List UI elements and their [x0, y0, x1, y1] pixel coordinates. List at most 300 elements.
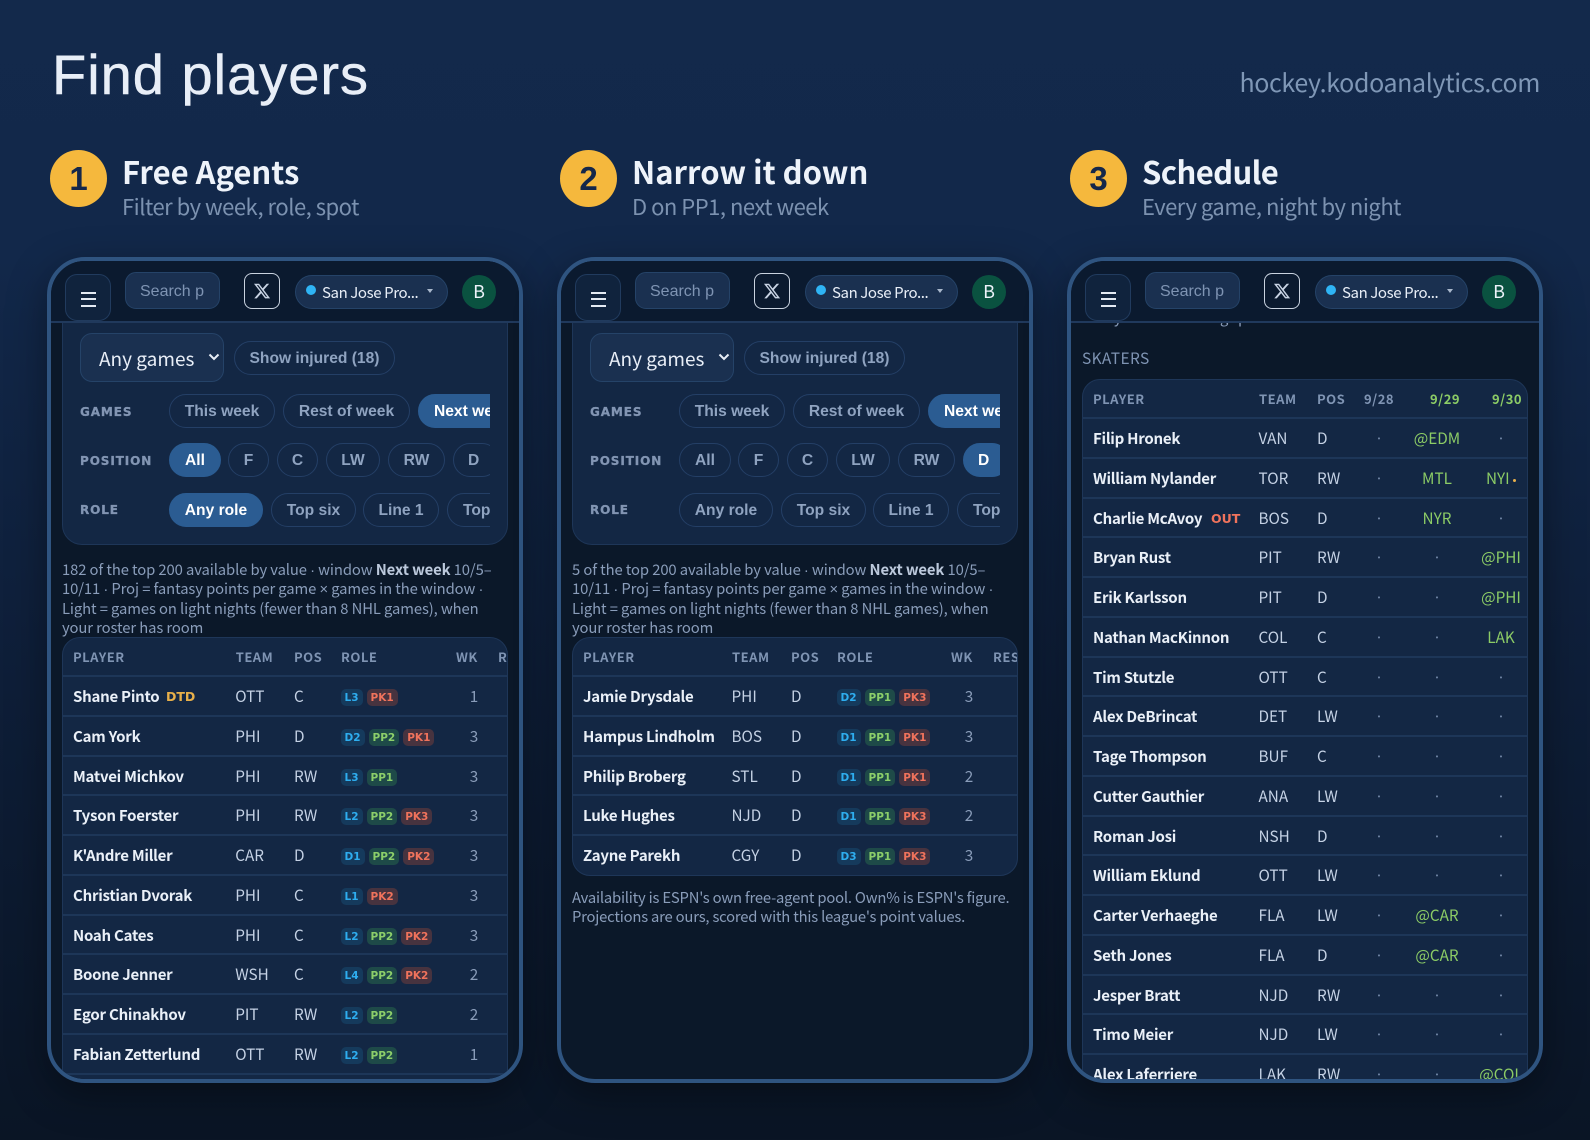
user avatar	[1482, 275, 1516, 309]
row: Egor Chinakhov: L2	[344, 1010, 358, 1022]
row: Philip Broberg	[573, 754, 1019, 794]
position label: POSITION	[590, 454, 662, 468]
row: Philip Broberg: 2	[965, 764, 973, 786]
row: Tage Thompson	[1083, 735, 1529, 775]
position filter pills: F	[754, 452, 763, 469]
row: Zayne Parekh: CGY	[732, 844, 759, 866]
row: Nathan MacKinnon: LAK	[1487, 626, 1515, 648]
row: Tyson Foerster: Tyson Foerster	[73, 805, 178, 826]
row: Matvei Michkov: Matvei Michkov	[73, 766, 184, 786]
site URL: hockey.kodoanalytics.com	[1239, 64, 1540, 100]
row: Noah Cates	[63, 914, 509, 953]
table header	[1093, 389, 1522, 408]
position filter pills	[169, 443, 490, 477]
row: Carter Verhaeghe: FLA	[1258, 904, 1285, 926]
step 1 heading: Free Agents	[122, 148, 299, 193]
row: Cam York: 3	[470, 725, 478, 747]
row: Timo Meier: LW	[1317, 1023, 1338, 1045]
position filter pills: F	[244, 452, 253, 469]
row: Christian Dvorak: L1	[344, 891, 358, 903]
icon: X button	[754, 273, 790, 309]
row: Philip Broberg: PP1	[869, 772, 891, 784]
row: Tage Thompson: ·	[1433, 745, 1441, 767]
explanatory note: your roster has room	[572, 617, 713, 638]
position filter pills: All	[695, 452, 715, 469]
table header: TEAM	[732, 647, 770, 666]
step 2 heading: Narrow it down	[632, 148, 868, 193]
games filter pills	[679, 394, 1000, 428]
row: Hampus Lindholm: PP1	[869, 732, 891, 744]
row: William Eklund	[1083, 854, 1529, 894]
role filter pills	[679, 493, 1000, 527]
explanatory note: 182 of the top 200 available by value · window Next week 10/5–	[62, 559, 492, 580]
row: Tyson Foerster: PHI	[235, 804, 260, 826]
row: Carter Verhaeghe: @CAR	[1415, 904, 1459, 926]
footer note	[572, 887, 1009, 927]
row: Zayne Parekh: PK3	[903, 851, 926, 863]
row: Cutter Gauthier: ANA	[1258, 785, 1288, 807]
position filter pills	[679, 443, 1000, 477]
row: Zayne Parekh: D3	[840, 851, 857, 863]
row: Noah Cates: 3	[470, 924, 478, 946]
row: Boone Jenner	[63, 953, 509, 993]
row: Tim Stutzle: ·	[1497, 666, 1505, 688]
panel: phone 3 schedule	[1067, 257, 1543, 1083]
row: Hampus Lindholm: PK1	[903, 732, 926, 744]
row: Carter Verhaeghe: Carter Verhaeghe	[1093, 905, 1217, 926]
app top bar	[561, 261, 1029, 323]
row: Fabian Zetterlund: RW	[294, 1043, 317, 1065]
row: Luke Hughes: PK3	[903, 811, 926, 823]
league selector	[1315, 275, 1468, 309]
row: Noah Cates: C	[294, 924, 304, 946]
row: Jamie Drysdale: D2	[840, 692, 857, 704]
row: Filip Hronek: ·	[1375, 427, 1383, 449]
row: Filip Hronek: VAN	[1258, 427, 1287, 449]
row: Fabian Zetterlund: Fabian Zetterlund	[73, 1044, 200, 1065]
position filter pills: D	[978, 452, 989, 469]
games select: Any games	[609, 345, 704, 372]
row: Matvei Michkov: L3	[344, 772, 358, 784]
role filter pills	[169, 493, 490, 527]
row: Hampus Lindholm: BOS	[732, 725, 762, 747]
row: Alex DeBrincat: LW	[1317, 705, 1338, 727]
row: Bryan Rust: Bryan Rust	[1093, 547, 1171, 568]
icon: menu button	[1085, 274, 1131, 321]
row: Jamie Drysdale: PK3	[903, 692, 926, 704]
position filter pills: C	[802, 452, 813, 469]
row: William Eklund: OTT	[1258, 864, 1288, 886]
row: William Nylander: MTL	[1422, 467, 1452, 489]
row: Jamie Drysdale: 3	[965, 685, 973, 707]
row: Charlie McAvoy: ·	[1497, 506, 1505, 528]
row: Fabian Zetterlund: 1	[470, 1043, 478, 1065]
row: Timo Meier: ·	[1375, 1023, 1383, 1045]
row: Carter Verhaeghe: LW	[1317, 904, 1338, 926]
row: Philip Broberg: Philip Broberg	[583, 766, 686, 786]
row: Cam York: Cam York	[73, 726, 140, 747]
position filter pills: RW	[914, 452, 939, 469]
row: Hampus Lindholm	[573, 715, 1019, 754]
row: William Nylander: ·	[1375, 467, 1383, 489]
step 1 number badge	[50, 150, 107, 207]
row: Roman Josi: D	[1317, 824, 1328, 846]
row: Roman Josi: ·	[1497, 824, 1505, 846]
row: Tyson Foerster: RW	[294, 804, 317, 826]
row: Alex DeBrincat: ·	[1497, 705, 1505, 727]
row: Luke Hughes: Luke Hughes	[583, 805, 675, 826]
row: Nathan MacKinnon	[1083, 616, 1529, 656]
row: Cam York: PP2	[373, 732, 395, 744]
row: Nathan MacKinnon: ·	[1433, 626, 1441, 648]
row: Boone Jenner: Boone Jenner	[73, 964, 172, 985]
user avatar	[462, 275, 496, 309]
row: Tage Thompson: BUF	[1258, 745, 1288, 767]
icon: menu button	[575, 274, 621, 321]
row: William Nylander: NYI	[1486, 467, 1510, 489]
scrolled text peeking under top bar: g	[1220, 307, 1228, 328]
row: Boone Jenner: PP2	[370, 970, 393, 982]
row: Cutter Gauthier: ·	[1375, 785, 1383, 807]
skaters label: SKATERS	[1082, 347, 1150, 369]
position filter pills: C	[292, 452, 303, 469]
row: Philip Broberg: D1	[840, 772, 857, 784]
row: Egor Chinakhov: PIT	[235, 1003, 259, 1025]
row: Seth Jones: Seth Jones	[1093, 945, 1171, 966]
row: Erik Karlsson: @PHI	[1481, 586, 1521, 608]
row: Hampus Lindholm: 3	[965, 725, 973, 747]
row: Nathan MacKinnon: COL	[1258, 626, 1287, 648]
row: Luke Hughes: NJD	[732, 804, 761, 826]
row: Boone Jenner: 2	[470, 963, 478, 985]
row: Charlie McAvoy: D	[1317, 506, 1328, 528]
row: Fabian Zetterlund: PP2	[370, 1050, 393, 1062]
row: Shane Pinto	[63, 675, 509, 715]
table header: 9/30	[1492, 389, 1522, 408]
row: William Nylander: RW	[1317, 467, 1340, 489]
row: Noah Cates: PP2	[370, 930, 393, 942]
table header: PLAYER	[583, 647, 635, 666]
row: Jamie Drysdale: Jamie Drysdale	[583, 686, 694, 707]
table header: POS	[294, 647, 322, 666]
row: Seth Jones: @CAR	[1415, 944, 1459, 966]
row: Tage Thompson: C	[1317, 745, 1327, 767]
table header: 9/29	[1430, 389, 1460, 408]
row: Cutter Gauthier	[1083, 775, 1529, 814]
row: Charlie McAvoy: ·	[1375, 506, 1383, 528]
step 2 number badge	[560, 150, 617, 207]
row: Charlie McAvoy: NYR	[1423, 506, 1451, 528]
row: Jamie Drysdale: PHI	[732, 685, 757, 707]
row: Hampus Lindholm: Hampus Lindholm	[583, 726, 715, 747]
explanatory note: 10/11 · Proj = fantasy points per game × games in the window ·	[62, 578, 483, 599]
panel: phone 2 narrow it down	[557, 257, 1033, 1083]
games select: Any games	[99, 345, 194, 372]
row: Christian Dvorak: PK2	[370, 891, 394, 903]
step 3 number badge: 3	[1089, 160, 1108, 197]
row: Timo Meier: NJD	[1258, 1023, 1288, 1045]
row: Jamie Drysdale: PP1	[869, 692, 891, 704]
row: William Nylander: TOR	[1258, 467, 1288, 489]
row: Matvei Michkov: PP1	[370, 772, 393, 784]
table header: WK	[951, 647, 973, 666]
row: Boone Jenner: WSH	[235, 963, 269, 985]
row: Luke Hughes: D1	[840, 811, 857, 823]
row: Christian Dvorak	[63, 874, 509, 914]
role filter pills: Any role	[185, 502, 247, 519]
row: Tyson Foerster: 3	[470, 804, 478, 826]
games filter pills: This week	[185, 403, 259, 420]
user avatar: B	[1493, 278, 1505, 304]
filter card	[572, 231, 1018, 545]
games label: GAMES	[590, 405, 642, 419]
row: Roman Josi: ·	[1433, 824, 1441, 846]
row: Philip Broberg: D	[791, 764, 802, 786]
row: Tim Stutzle	[1083, 656, 1529, 695]
row: Luke Hughes: PP1	[869, 811, 891, 823]
role label: ROLE	[80, 503, 119, 517]
row: Luke Hughes: D	[791, 804, 802, 826]
table header: TEAM	[1259, 389, 1297, 408]
row: Carter Verhaeghe: ·	[1497, 904, 1505, 926]
row: Seth Jones: ·	[1497, 944, 1505, 966]
row: William Eklund: LW	[1317, 864, 1338, 886]
row: Cutter Gauthier: LW	[1317, 785, 1338, 807]
row: Charlie McAvoy	[1083, 496, 1529, 536]
row: Shane Pinto: DTD	[166, 689, 195, 704]
row: Charlie McAvoy: BOS	[1258, 506, 1289, 528]
app top bar	[51, 261, 519, 323]
footer note: Availability is ESPN's own free-agent pool. Own% is ESPN's figure.	[572, 887, 1009, 908]
row: Charlie McAvoy: OUT	[1211, 510, 1240, 526]
row: Zayne Parekh: D	[791, 844, 802, 866]
table header: POS	[791, 647, 819, 666]
role filter pills: Top six	[797, 502, 850, 519]
row: William Nylander: William Nylander	[1093, 468, 1216, 489]
row: Seth Jones	[1083, 934, 1529, 974]
games filter pills: This week	[695, 403, 769, 420]
row: Jesper Bratt: ·	[1375, 984, 1383, 1006]
role filter pills: Top six	[287, 502, 340, 519]
games filter pills: Rest of week	[809, 403, 904, 420]
games select	[80, 333, 224, 382]
row: Tim Stutzle: OTT	[1258, 666, 1288, 688]
row: K'Andre Miller: PP2	[373, 851, 395, 863]
user avatar: B	[473, 278, 485, 304]
row: Tyson Foerster: PP2	[370, 811, 393, 823]
table header: 9/28	[1364, 389, 1394, 408]
title: Find players	[52, 43, 369, 106]
table header: PLAYER	[1093, 389, 1145, 408]
scrolled text peeking under top bar: p	[1238, 307, 1247, 328]
row: Carter Verhaeghe: ·	[1375, 904, 1383, 926]
row: Boone Jenner: L4	[344, 970, 358, 982]
row: William Eklund: ·	[1433, 864, 1441, 886]
row: Cam York	[63, 715, 509, 754]
table header: POS	[1317, 389, 1345, 408]
row: Erik Karlsson: Erik Karlsson	[1093, 587, 1187, 608]
row: Erik Karlsson: PIT	[1258, 586, 1282, 608]
row: Filip Hronek	[1083, 417, 1529, 457]
row: Nathan MacKinnon: ·	[1375, 626, 1383, 648]
row: Noah Cates: L2	[344, 930, 358, 942]
row: Jesper Bratt: RW	[1317, 984, 1340, 1006]
row: Bryan Rust	[1083, 536, 1529, 576]
row: Timo Meier	[1083, 1013, 1529, 1053]
row: Christian Dvorak: PHI	[235, 884, 260, 906]
row: Nathan MacKinnon: Nathan MacKinnon	[1093, 627, 1229, 648]
row: Alex DeBrincat: Alex DeBrincat	[1093, 706, 1197, 727]
position filter pills: All	[185, 452, 205, 469]
row: Erik Karlsson: D	[1317, 586, 1328, 608]
step 3 subtitle: Every game, night by night	[1142, 190, 1401, 222]
row: William Nylander	[1083, 457, 1529, 496]
league selector	[295, 275, 448, 309]
role label: ROLE	[590, 503, 629, 517]
row: Tyson Foerster: L2	[344, 811, 358, 823]
row: Zayne Parekh	[573, 834, 1019, 874]
row: Cutter Gauthier: ·	[1433, 785, 1441, 807]
icon: X button	[1264, 273, 1300, 309]
row: Shane Pinto: C	[294, 685, 304, 707]
row: Cutter Gauthier: ·	[1497, 785, 1505, 807]
show injured toggle: Show injured (18)	[760, 350, 889, 367]
explanatory note: 10/11 · Proj = fantasy points per game × games in the window ·	[572, 578, 993, 599]
row: Cam York: PK1	[407, 732, 430, 744]
row: Jesper Bratt: ·	[1497, 984, 1505, 1006]
row: Luke Hughes	[573, 794, 1019, 834]
table header: TEAM	[236, 647, 273, 666]
footer note: Projections are ours, scored with this league's point values.	[572, 906, 965, 927]
row: Carter Verhaeghe	[1083, 894, 1529, 934]
row: Philip Broberg: PK1	[903, 772, 926, 784]
row: Roman Josi	[1083, 814, 1529, 854]
explanatory note	[62, 559, 492, 638]
row: Bryan Rust: ·	[1433, 546, 1441, 568]
role filter pills: Any role	[695, 502, 757, 519]
row: Filip Hronek: ·	[1497, 427, 1505, 449]
search box	[125, 272, 220, 309]
row: Erik Karlsson: ·	[1375, 586, 1383, 608]
row: Bryan Rust: @PHI	[1481, 546, 1521, 568]
show injured toggle: Show injured (18)	[250, 350, 379, 367]
games label: GAMES	[80, 405, 132, 419]
row: Alex DeBrincat: ·	[1433, 705, 1441, 727]
row: Alex DeBrincat	[1083, 695, 1529, 735]
row: Cam York: PHI	[235, 725, 260, 747]
row: Shane Pinto: Shane Pinto	[73, 686, 159, 707]
row: Matvei Michkov	[63, 754, 509, 794]
player table	[62, 637, 508, 1117]
games filter pills: Rest of week	[299, 403, 394, 420]
icon: menu button	[65, 274, 111, 321]
step 3 number badge	[1070, 150, 1127, 207]
row: Fabian Zetterlund: L2	[344, 1050, 358, 1062]
row: Alex Laferriere	[1083, 1053, 1529, 1093]
row: Fabian Zetterlund	[63, 1033, 509, 1072]
row: Roman Josi: ·	[1375, 824, 1383, 846]
row: Tyson Foerster	[63, 794, 509, 834]
row: Tim Stutzle: Tim Stutzle	[1093, 666, 1174, 688]
row: Hampus Lindholm: D1	[840, 732, 857, 744]
row: Roman Josi: Roman Josi	[1093, 826, 1176, 846]
row: K'Andre Miller: K'Andre Miller	[73, 845, 172, 866]
row: Luke Hughes: 2	[965, 804, 973, 826]
row: Cam York: D	[294, 725, 305, 747]
row: Timo Meier: ·	[1497, 1023, 1505, 1045]
scrolled text peeking under top bar	[1114, 307, 1247, 328]
row: Seth Jones: D	[1317, 944, 1328, 966]
row: Filip Hronek: Filip Hronek	[1093, 428, 1180, 449]
row: Noah Cates: Noah Cates	[73, 924, 153, 946]
row: K'Andre Miller: 3	[470, 844, 478, 866]
row: Tyson Foerster: PK3	[405, 811, 428, 823]
table header	[73, 647, 508, 666]
explanatory note: Light = games on light nights (fewer than 8 NHL games), when	[572, 598, 989, 619]
row: Jamie Drysdale	[573, 675, 1019, 715]
row: Roman Josi: NSH	[1258, 824, 1290, 846]
row: Charlie McAvoy: Charlie McAvoy	[1093, 508, 1202, 528]
row: Christian Dvorak: 3	[470, 884, 478, 906]
show injured toggle	[744, 341, 905, 375]
row: Jamie Drysdale: D	[791, 685, 802, 707]
league selector	[805, 275, 958, 309]
row: Alex DeBrincat: DET	[1258, 705, 1287, 727]
row: K'Andre Miller: D1	[344, 851, 361, 863]
row: Erik Karlsson: ·	[1433, 586, 1441, 608]
row: Tage Thompson: ·	[1497, 745, 1505, 767]
row: Filip Hronek: D	[1317, 427, 1328, 449]
scrolled text peeking under top bar: y	[1114, 307, 1122, 328]
row: Cam York: D2	[344, 732, 361, 744]
app top bar	[1071, 261, 1539, 323]
player table	[572, 637, 1018, 876]
position filter pills: LW	[341, 452, 365, 469]
games filter pills	[169, 394, 490, 428]
step 1 number badge: 1	[69, 160, 88, 197]
row: Egor Chinakhov: PP2	[370, 1010, 393, 1022]
search box	[635, 272, 730, 309]
position filter pills: LW	[851, 452, 875, 469]
explanatory note: your roster has room	[62, 617, 203, 638]
row: K'Andre Miller	[63, 834, 509, 874]
league selector: San Jose Pro...	[832, 282, 928, 303]
row: Matvei Michkov: PHI	[235, 764, 260, 786]
row: Timo Meier: Timo Meier	[1093, 1024, 1173, 1045]
row: Timo Meier: ·	[1433, 1023, 1441, 1045]
row: K'Andre Miller: CAR	[235, 844, 264, 866]
row: Tim Stutzle: ·	[1375, 666, 1383, 688]
row: Tage Thompson: ·	[1375, 745, 1383, 767]
row: K'Andre Miller: PK2	[407, 851, 430, 863]
row: Zayne Parekh: PP1	[869, 851, 891, 863]
role filter pills: Line 1	[888, 502, 934, 519]
row: Erik Karlsson	[1083, 576, 1529, 616]
table header	[583, 647, 1018, 666]
search box	[1145, 272, 1240, 309]
table header: PLAYER	[73, 647, 125, 666]
schedule table	[1082, 379, 1528, 1099]
row: William Eklund: William Eklund	[1093, 865, 1200, 886]
league selector: San Jose Pro...	[322, 282, 418, 303]
row: Shane Pinto: 1	[470, 685, 478, 707]
row: Bryan Rust: PIT	[1258, 546, 1282, 568]
row: Shane Pinto: PK1	[370, 692, 394, 704]
step 2 number badge: 2	[579, 160, 598, 197]
user avatar	[972, 275, 1006, 309]
row: Noah Cates: PHI	[235, 924, 260, 946]
panel: phone 1 free agents	[47, 257, 523, 1083]
